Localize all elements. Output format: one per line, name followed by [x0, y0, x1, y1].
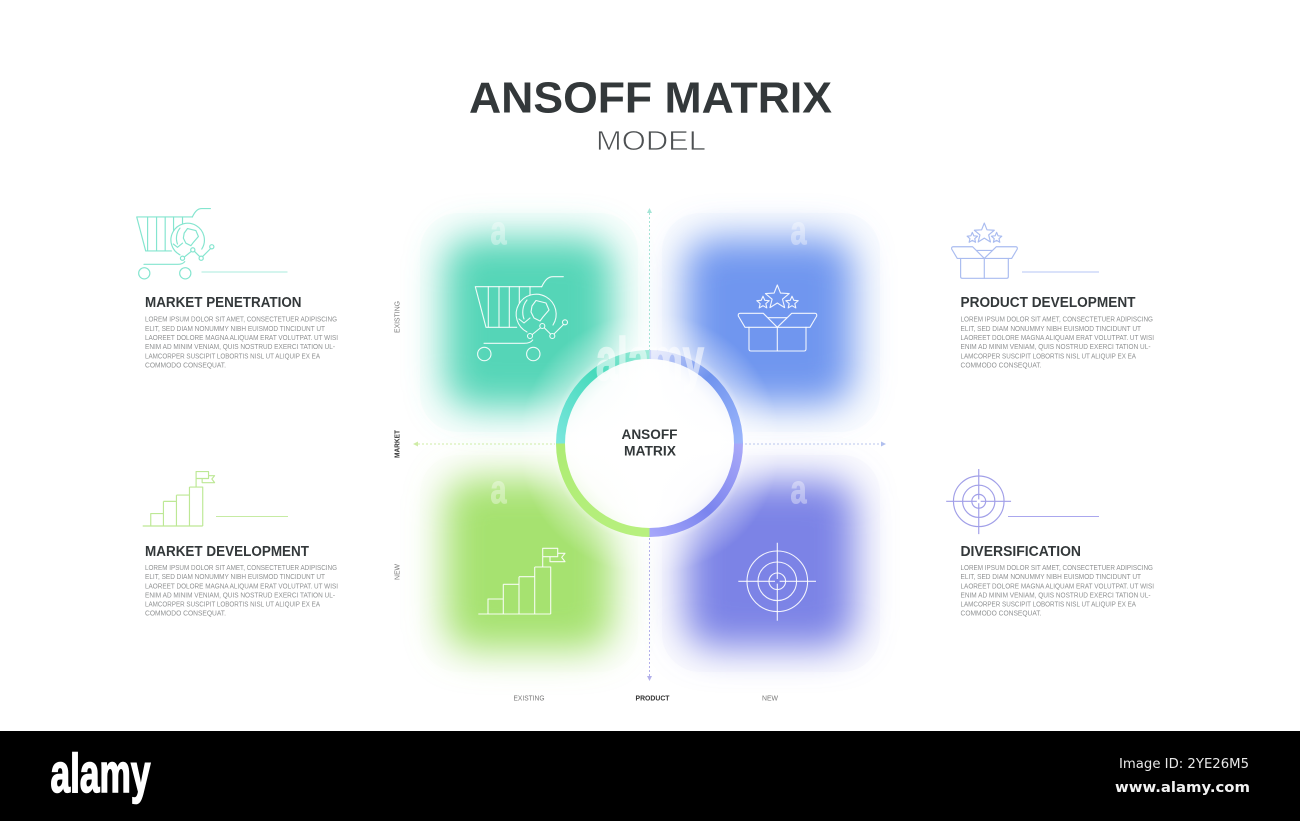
icon: growth steps with flag — [143, 472, 215, 526]
label: market existing: EXISTING — [394, 301, 402, 333]
icon: target crosshair (center) — [738, 543, 816, 621]
icon: open box with stars — [952, 223, 1017, 278]
watermark: small marks on quadrants — [490, 209, 807, 512]
heading: market penetration: MARKET PENETRATION — [145, 295, 302, 311]
center label — [622, 427, 678, 459]
icon: growth steps with flag (center) — [478, 548, 565, 614]
icon: shopping cart — [137, 209, 214, 279]
text block: market development — [143, 472, 338, 618]
center ring — [560, 354, 739, 532]
body: product development: LOREM IPSUM DOLOR SIT AMET, CONSECTETUER ADIPISCING — [960, 317, 1153, 324]
body: diversification: LAMCORPER SUSCIPIT LOBORTIS NISL UT ALIQUIP EX EA — [960, 602, 1136, 609]
body: product development: LAMCORPER SUSCIPIT LOBORTIS NISL UT ALIQUIP EX EA — [960, 353, 1136, 360]
arrow: market axis right — [745, 442, 886, 446]
title: ANSOFF MATRIX — [469, 74, 832, 122]
icon: open box with stars (center) — [738, 285, 817, 351]
text block: diversification — [946, 469, 1154, 618]
body: diversification: ENIM AD MINIM VENIAM, QUIS NOSTRUD EXERCI TATION UL- — [960, 592, 1151, 599]
body: market development: ELIT, SED DIAM NONUMMY NIBH EUISMOD TINCIDUNT UT — [145, 574, 326, 581]
body: diversification: LAOREET DOLORE MAGNA ALIQUAM ERAT VOLUTPAT. UT WISI — [960, 583, 1154, 590]
body: diversification — [960, 565, 1154, 618]
arrow: market axis left — [413, 442, 555, 446]
body: market development: LOREM IPSUM DOLOR SIT AMET, CONSECTETUER ADIPISCING — [145, 565, 337, 572]
icon: shopping cart with globe (center) — [475, 277, 568, 361]
label: market axis: MARKET — [394, 429, 402, 458]
text block: market penetration — [137, 209, 338, 370]
subtitle: MODEL — [596, 125, 706, 156]
watermark: small marks on quadrants: a — [790, 209, 807, 253]
body: market penetration: LAMCORPER SUSCIPIT LOBORTIS NISL UT ALIQUIP EX EA — [145, 353, 320, 360]
axis labels — [394, 301, 778, 702]
center white glow — [508, 302, 792, 586]
image id: Image ID: 2YE26M5 — [1119, 756, 1249, 772]
heading: product development: PRODUCT DEVELOPMENT — [960, 295, 1136, 311]
panel: market penetration quadrant — [420, 213, 638, 432]
watermark: small marks on quadrants: a — [790, 468, 807, 512]
body: market penetration: LAOREET DOLORE MAGNA ALIQUAM ERAT VOLUTPAT. UT WISI — [145, 335, 338, 342]
footer logo: alamy — [50, 742, 151, 804]
website: www.alamy.com — [1115, 780, 1250, 796]
body: product development: COMMODO CONSEQUAT. — [960, 362, 1042, 370]
label: product axis: PRODUCT — [636, 696, 670, 702]
body: product development: ENIM AD MINIM VENIAM, QUIS NOSTRUD EXERCI TATION UL- — [960, 344, 1151, 351]
body: diversification: COMMODO CONSEQUAT. — [960, 611, 1042, 618]
body: market development — [145, 565, 338, 618]
label: product existing: EXISTING — [514, 696, 544, 702]
body: product development — [960, 317, 1154, 370]
body: market development: ENIM AD MINIM VENIAM, QUIS NOSTRUD EXERCI TATION UL- — [145, 592, 336, 599]
icon: target crosshair — [946, 469, 1011, 534]
watermark: small marks on quadrants: a — [490, 468, 507, 512]
heading: market development: MARKET DEVELOPMENT — [145, 544, 309, 560]
body: market penetration: LOREM IPSUM DOLOR SIT AMET, CONSECTETUER ADIPISCING — [145, 317, 337, 324]
label: market new: NEW — [394, 564, 402, 580]
body: market penetration: ENIM AD MINIM VENIAM, QUIS NOSTRUD EXERCI TATION UL- — [145, 344, 336, 351]
body: diversification: ELIT, SED DIAM NONUMMY NIBH EUISMOD TINCIDUNT UT — [960, 574, 1142, 581]
body: product development: LAOREET DOLORE MAGNA ALIQUAM ERAT VOLUTPAT. UT WISI — [960, 335, 1154, 342]
footer band — [0, 731, 1300, 821]
body: diversification: LOREM IPSUM DOLOR SIT AMET, CONSECTETUER ADIPISCING — [960, 565, 1153, 572]
body: market penetration: ELIT, SED DIAM NONUMMY NIBH EUISMOD TINCIDUNT UT — [145, 326, 326, 333]
text block: product development — [952, 223, 1154, 370]
watermark: small marks on quadrants: a — [490, 209, 507, 253]
body: market penetration — [145, 317, 338, 370]
panel: market development quadrant — [420, 455, 638, 672]
body: market development: LAMCORPER SUSCIPIT LOBORTIS NISL UT ALIQUIP EX EA — [145, 602, 320, 609]
arrow: product axis up — [647, 208, 652, 350]
watermark: center alamy: alamy — [596, 326, 704, 393]
center label: ANSOFF — [622, 427, 678, 442]
panel: diversification quadrant — [662, 455, 880, 672]
body: market development: LAOREET DOLORE MAGNA ALIQUAM ERAT VOLUTPAT. UT WISI — [145, 583, 338, 590]
body: product development: ELIT, SED DIAM NONUMMY NIBH EUISMOD TINCIDUNT UT — [960, 326, 1142, 333]
panel: product development quadrant — [662, 213, 880, 432]
body: market development: COMMODO CONSEQUAT. — [145, 611, 226, 618]
body: market penetration: COMMODO CONSEQUAT. — [145, 362, 226, 370]
label: product new: NEW — [762, 696, 778, 702]
heading: diversification: DIVERSIFICATION — [960, 544, 1081, 560]
arrow: product axis down — [647, 538, 652, 681]
center label: MATRIX — [624, 444, 676, 459]
